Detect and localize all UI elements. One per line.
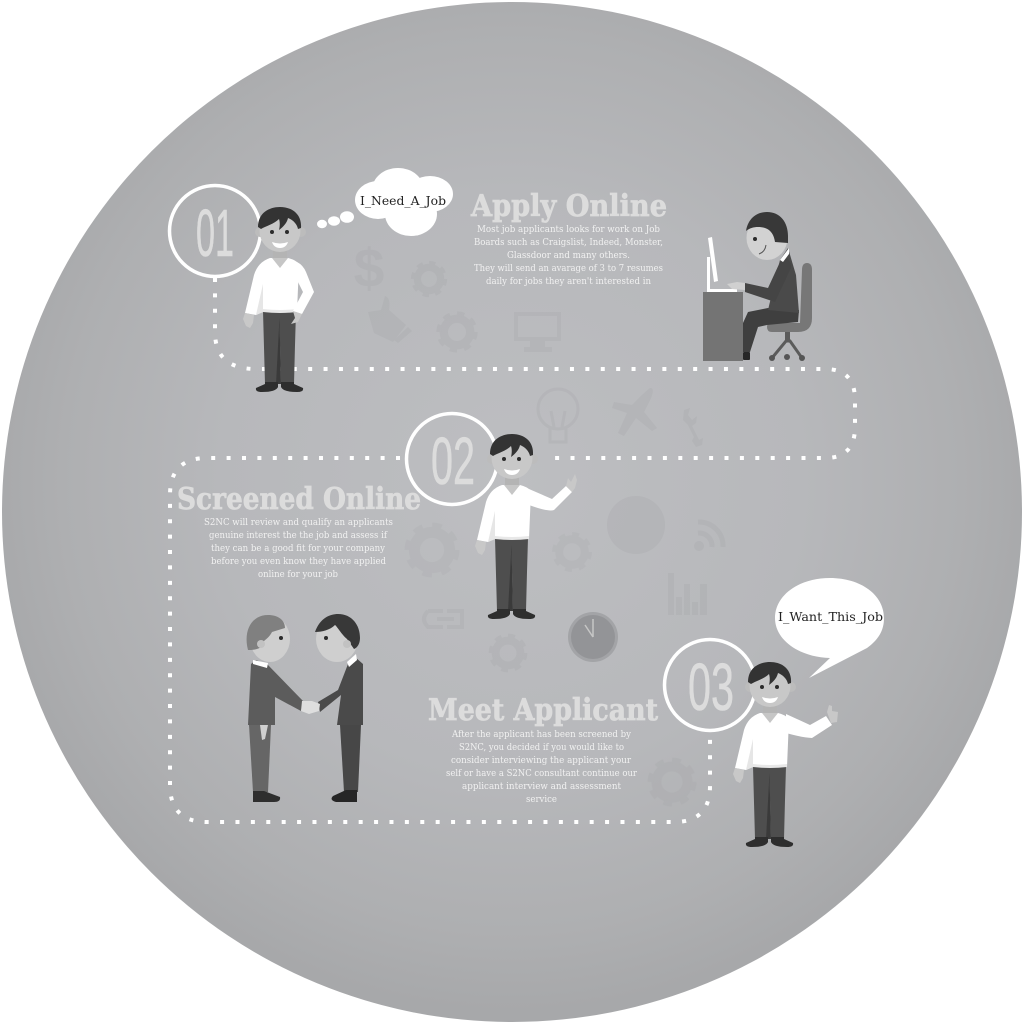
icon: large gear [408, 526, 456, 574]
step circle 03 [664, 640, 756, 730]
text block: Meet Applicant: applicant interview and assessment [462, 781, 621, 792]
chair [767, 263, 812, 361]
step circle 02 [406, 414, 498, 504]
shoe [743, 352, 750, 360]
faint background icons [354, 237, 723, 803]
text block: Apply Online: Boards such as Craigslist, Indeed, Monster, [474, 237, 663, 248]
text: I_Want_This_Job: I_Want_This_Job [778, 609, 883, 624]
collar [780, 248, 789, 262]
icon: light bulb [538, 389, 578, 442]
text block: Meet Applicant: S2NC, you decided if you would like to [459, 742, 624, 753]
torso [768, 248, 799, 313]
head [746, 216, 788, 260]
laptop [707, 237, 737, 292]
speech bubble [775, 578, 884, 678]
icon: gear 1 [413, 263, 445, 295]
text block: Meet Applicant: consider interviewing the applicant your [451, 755, 631, 766]
text block: Apply Online: Most job applicants looks for work on Job [477, 224, 660, 235]
icon: gear 2 [439, 314, 475, 350]
text: I_Need_A_Job: I_Need_A_Job [360, 193, 446, 208]
icon: monitor [514, 312, 561, 352]
thought bubble [317, 168, 453, 236]
icon: gear 3 [554, 534, 590, 570]
text block: Apply Online [474, 224, 663, 287]
text block: Meet Applicant: service [526, 794, 557, 805]
arm and hand [727, 282, 745, 290]
figure 1: man thinking [243, 207, 314, 392]
icon: dollar sign: $ [354, 237, 384, 299]
text block: Screened Online [204, 517, 393, 580]
clasped hands [301, 701, 320, 714]
icon: airplane [612, 388, 657, 436]
text block: Apply Online: They will send an avarage of 3 to 7 resumes [474, 263, 663, 274]
icon: gear 5 [651, 761, 693, 803]
legs [743, 308, 799, 352]
step circle 02: 02 [431, 424, 475, 499]
figure 3: man thumbs up [733, 662, 838, 847]
icon: globe [607, 496, 665, 554]
text block: Apply Online: daily for jobs they aren't interested in [486, 276, 651, 287]
step circle 01 [170, 186, 260, 276]
icon: wrench [683, 408, 703, 447]
figure 2: man waving [475, 434, 577, 619]
text block: Screened Online: they can be a good fit for your company [211, 543, 386, 554]
icon: bar chart [668, 573, 707, 615]
text block: Meet Applicant [446, 729, 637, 805]
figure: two men shaking hands [247, 614, 363, 802]
heading: Meet Applicant: Meet Applicant [428, 693, 658, 728]
text block: Screened Online: before you even know they have applied [211, 556, 386, 567]
icon: rss [694, 522, 723, 551]
heading: Screened Online: Screened Online [177, 482, 421, 517]
text block: Apply Online: Glassdoor and many others. [507, 250, 630, 261]
icon: clock [568, 612, 618, 662]
dotted route line [170, 278, 855, 822]
text block: Screened Online: online for your job [258, 569, 338, 580]
right man [315, 614, 363, 802]
step circle 03: 03 [688, 650, 734, 725]
icon: thumbs up [368, 296, 412, 343]
left man [247, 615, 303, 802]
text block: Meet Applicant: self or have a S2NC consultant continue our [446, 768, 637, 779]
text block: Meet Applicant: After the applicant has been screened by [451, 729, 632, 740]
heading: Apply Online: Apply Online [470, 189, 667, 224]
icon: gear 4 [491, 636, 525, 670]
icon: chain link [424, 611, 462, 627]
figure: man at desk [703, 212, 812, 361]
desk [703, 292, 743, 361]
step circle 01: 01 [196, 196, 234, 271]
text block: Screened Online: S2NC will review and qualify an applicants [204, 517, 393, 528]
text block: Screened Online: genuine interest the the job and assess if [209, 530, 388, 541]
